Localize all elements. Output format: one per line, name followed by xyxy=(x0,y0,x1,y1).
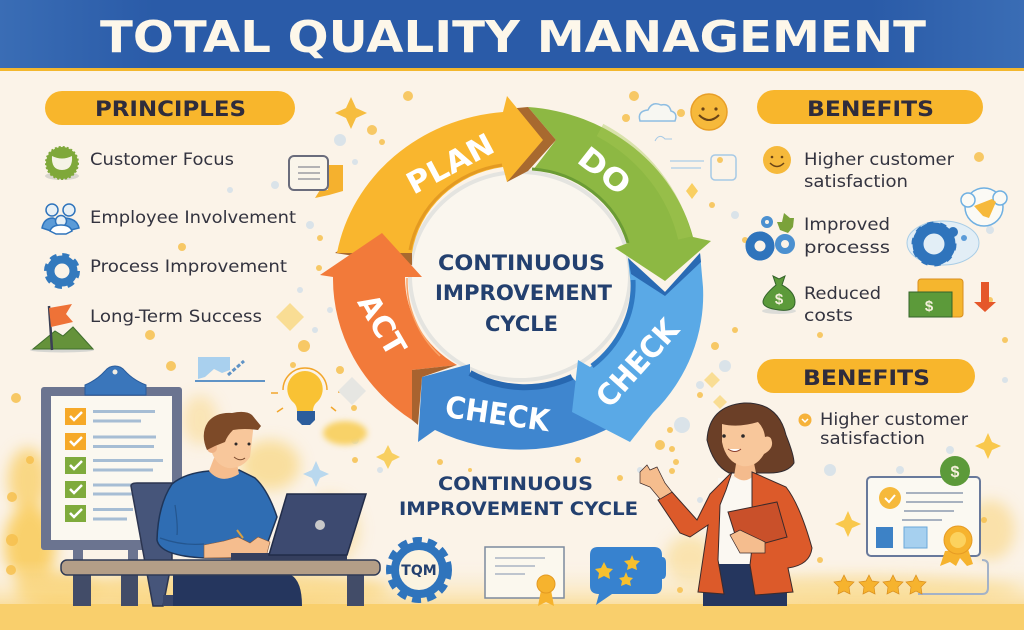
center label: IMPROVEMENT xyxy=(435,281,613,305)
man at laptop xyxy=(131,412,302,606)
icon: small gears xyxy=(747,213,794,259)
icon: chart decoration xyxy=(195,357,265,381)
head xyxy=(205,417,253,468)
eyes and mouth xyxy=(722,434,745,452)
ring shadow xyxy=(410,172,630,380)
tablet xyxy=(728,502,787,550)
item: employee involvement: Employee Involvement xyxy=(90,208,296,228)
heading: principles xyxy=(45,91,295,125)
heading: benefits xyxy=(757,90,983,124)
center label xyxy=(435,251,613,336)
brown fold: plan xyxy=(507,107,556,182)
item: reduced costs: Reduced xyxy=(804,284,881,304)
sweater xyxy=(157,470,277,558)
icon: smiley xyxy=(763,146,791,174)
item: process improvement: Process Improvement xyxy=(90,257,287,277)
icon: certificate xyxy=(867,456,988,594)
segment: check (right): CHECK xyxy=(589,311,688,415)
chair xyxy=(131,483,172,606)
brown fold: check xyxy=(412,365,457,425)
segment: check (right) xyxy=(572,253,703,442)
cycle diagram xyxy=(320,96,711,450)
clipboard checklist xyxy=(41,366,182,560)
item: higher customer satisfaction xyxy=(820,410,968,449)
item: improved process: Improved xyxy=(804,215,890,235)
icon: large gear cloud xyxy=(907,221,979,265)
hair xyxy=(204,412,261,450)
segment: act: ACT xyxy=(350,288,413,363)
neck xyxy=(209,458,239,479)
neck xyxy=(734,458,756,480)
sparkle xyxy=(303,461,329,487)
title: TOTAL QUALITY MANAGEMENT xyxy=(100,12,926,63)
icon: process improvement gear xyxy=(47,256,77,286)
raised hand xyxy=(640,465,672,499)
center label: CYCLE xyxy=(485,312,558,336)
shirt xyxy=(718,478,754,564)
center label: CONTINUOUS xyxy=(438,251,605,275)
segment: act xyxy=(320,233,457,420)
cloud and smiley decorations xyxy=(639,94,736,199)
icon: money bag: $ xyxy=(775,291,784,308)
splash decoration xyxy=(323,421,367,445)
pants xyxy=(703,562,787,606)
icon: check badge xyxy=(798,414,812,426)
chair seat xyxy=(163,595,228,606)
hair xyxy=(707,403,794,473)
heading: benefits: BENEFITS xyxy=(807,97,934,121)
face xyxy=(234,442,250,460)
item: higher customer satisfaction xyxy=(804,150,954,192)
segment: do: DO xyxy=(571,140,637,203)
item: reduced costs xyxy=(804,284,881,326)
segment: check (bottom): CHECK xyxy=(443,390,553,439)
icon: flag on mountain xyxy=(30,304,94,352)
icon: TQM gear xyxy=(389,540,449,600)
item: improved process: processs xyxy=(804,238,890,258)
presenter woman xyxy=(640,403,812,606)
pen xyxy=(237,530,243,538)
icon: money stack with down arrow: $ xyxy=(925,298,934,315)
icon: money bag xyxy=(762,276,796,314)
item: higher customer satisfaction: satisfaction xyxy=(820,429,925,449)
heading: benefits xyxy=(757,359,975,393)
jacket right with sleeve xyxy=(750,472,812,595)
ear xyxy=(207,443,217,453)
icon: rating speech bubble xyxy=(590,547,666,605)
jacket left with arm xyxy=(658,472,732,594)
sparkle xyxy=(975,433,1001,459)
segment: plan xyxy=(337,96,543,253)
caption: continuous improvement cycle: CONTINUOUS xyxy=(438,473,593,495)
icon: certificate xyxy=(485,547,564,606)
panel: benefits top xyxy=(747,90,1007,326)
pants xyxy=(173,575,302,606)
item: improved process xyxy=(804,215,890,258)
caption: continuous improvement cycle xyxy=(399,473,638,520)
icon: money stack with down arrow xyxy=(909,279,996,317)
check items xyxy=(65,408,163,522)
segment: plan: PLAN xyxy=(401,127,500,202)
icon: flower cloud with tag xyxy=(961,188,1007,226)
item: higher customer satisfaction: Higher customer xyxy=(804,150,954,170)
icon: four stars xyxy=(834,575,926,594)
item: higher customer satisfaction: Higher customer xyxy=(820,410,968,430)
panel: benefits lower xyxy=(757,359,1001,594)
holding hand xyxy=(730,530,765,553)
sparkle xyxy=(835,511,861,537)
desk xyxy=(61,560,380,606)
heading: benefits: BENEFITS xyxy=(803,366,930,390)
caption: continuous improvement cycle: IMPROVEMENT CYCLE xyxy=(399,498,638,520)
item: long-term success: Long-Term Success xyxy=(90,307,262,327)
item: reduced costs: costs xyxy=(804,306,853,326)
title banner xyxy=(0,0,1024,71)
icon: certificate: $ xyxy=(951,464,960,481)
brown fold: act xyxy=(335,219,412,265)
speech bubble decoration xyxy=(289,156,343,198)
item: higher customer satisfaction: satisfaction xyxy=(804,172,908,192)
heading: principles: PRINCIPLES xyxy=(95,97,246,121)
segment: do xyxy=(528,107,711,281)
diamond decoration xyxy=(338,377,366,405)
icon: light bulb xyxy=(271,368,344,425)
icon: TQM gear: TQM xyxy=(401,563,437,579)
segment: check (bottom) xyxy=(418,364,615,450)
panel: principles xyxy=(30,91,296,352)
sleeve fold xyxy=(160,505,204,544)
sparkle xyxy=(335,97,367,129)
sparkle xyxy=(376,445,400,469)
hands xyxy=(204,537,270,558)
laptop xyxy=(231,494,366,560)
icon: customer focus xyxy=(45,147,79,180)
icon: employee involvement xyxy=(42,204,79,234)
face xyxy=(722,422,772,466)
item: customer focus: Customer Focus xyxy=(90,150,234,170)
